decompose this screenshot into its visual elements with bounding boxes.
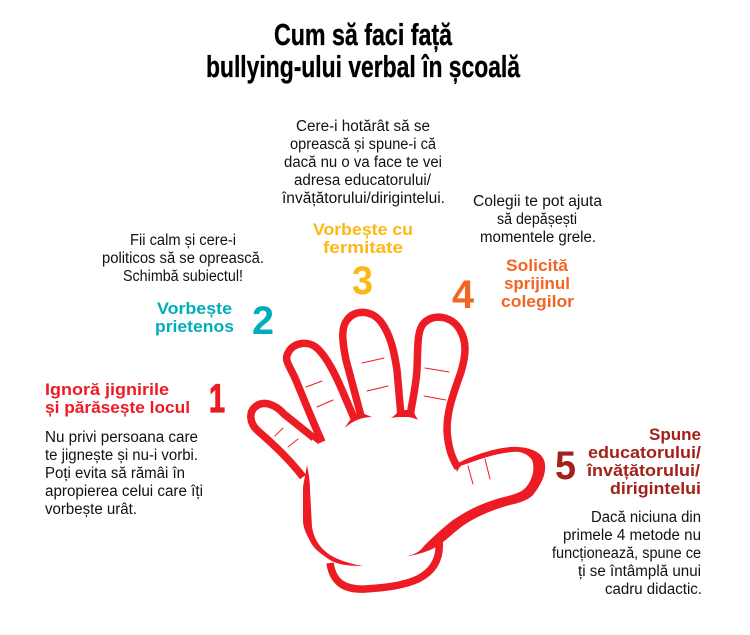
step 5 heading: dirigintelui (610, 479, 701, 498)
step 2 heading (155, 299, 234, 336)
step 4 heading (501, 256, 574, 311)
step 2 text: politicos să se oprească. (102, 250, 264, 267)
step 5 heading: învățătorului/ (586, 461, 700, 480)
step 4 text (473, 193, 602, 246)
step 1 heading: Ignoră jignirile (45, 380, 169, 399)
step 5 number: 5 (555, 444, 576, 488)
step 5 text (552, 509, 702, 598)
step 1 heading (45, 380, 190, 417)
step 3 text (281, 118, 445, 207)
step 4 panel (452, 193, 602, 317)
step 5 heading: educatorului/ (588, 443, 701, 462)
title: bullying-ului verbal în școală (206, 49, 521, 84)
step 1 text: apropierea celui care îți (45, 483, 203, 500)
step 1 text: Nu privi persoana care (45, 429, 198, 446)
step 3 panel (281, 118, 445, 303)
step 3 text: adresa educatorului/ (294, 172, 432, 189)
step 3 heading (313, 220, 413, 257)
step 1 text: vorbește urât. (45, 501, 137, 518)
step 2 text: Schimbă subiectul! (123, 268, 243, 285)
step 5 panel (552, 425, 702, 598)
step 4 text: să depășești (497, 211, 577, 228)
step 1 text (45, 429, 203, 518)
step 3 heading: fermitate (323, 238, 403, 257)
step 3 text: dacă nu o va face te vei (284, 154, 442, 171)
step 1 heading: și părăsește locul (45, 398, 190, 417)
step 5 text: primele 4 metode nu (563, 527, 701, 544)
step 3 text: Cere-i hotărât să se (296, 118, 430, 135)
step 4 heading: colegilor (501, 292, 574, 311)
step 5 text: funcționează, spune ce (552, 545, 701, 562)
title: Cum să faci față (274, 17, 453, 52)
step 3 text: oprească și spune-i că (290, 136, 436, 153)
icon: red hand outline (251, 312, 545, 589)
step 2 text: Fii calm și cere-i (130, 232, 236, 249)
step 1 panel (45, 377, 225, 518)
step 4 text: Colegii te pot ajuta (473, 193, 602, 210)
step 1 number: 1 (209, 377, 225, 421)
step 2 text (102, 232, 264, 285)
step 5 text: cadru didactic. (605, 581, 702, 598)
step 3 number: 3 (352, 259, 373, 303)
step 1 text: Poți evita să rămâi în (45, 465, 185, 482)
step 4 number: 4 (452, 273, 475, 317)
step 3 heading: Vorbește cu (313, 220, 413, 239)
step 5 text: ți se întâmplă unui (578, 563, 701, 580)
step 4 heading: Solicită (506, 256, 569, 275)
step 4 text: momentele grele. (480, 229, 596, 246)
step 2 heading: Vorbește (157, 299, 232, 318)
step 2 number: 2 (252, 299, 274, 343)
step 5 heading (586, 425, 701, 498)
step 1 text: te jignește și nu-i vorbi. (45, 447, 198, 464)
step 4 heading: sprijinul (504, 274, 570, 293)
step 2 heading: prietenos (155, 317, 234, 336)
step 5 text: Dacă niciuna din (591, 509, 701, 526)
step 5 heading: Spune (649, 425, 701, 444)
title (206, 17, 521, 84)
step 3 text: învățătorului/dirigintelui. (281, 190, 445, 207)
step 2 panel (102, 232, 274, 343)
